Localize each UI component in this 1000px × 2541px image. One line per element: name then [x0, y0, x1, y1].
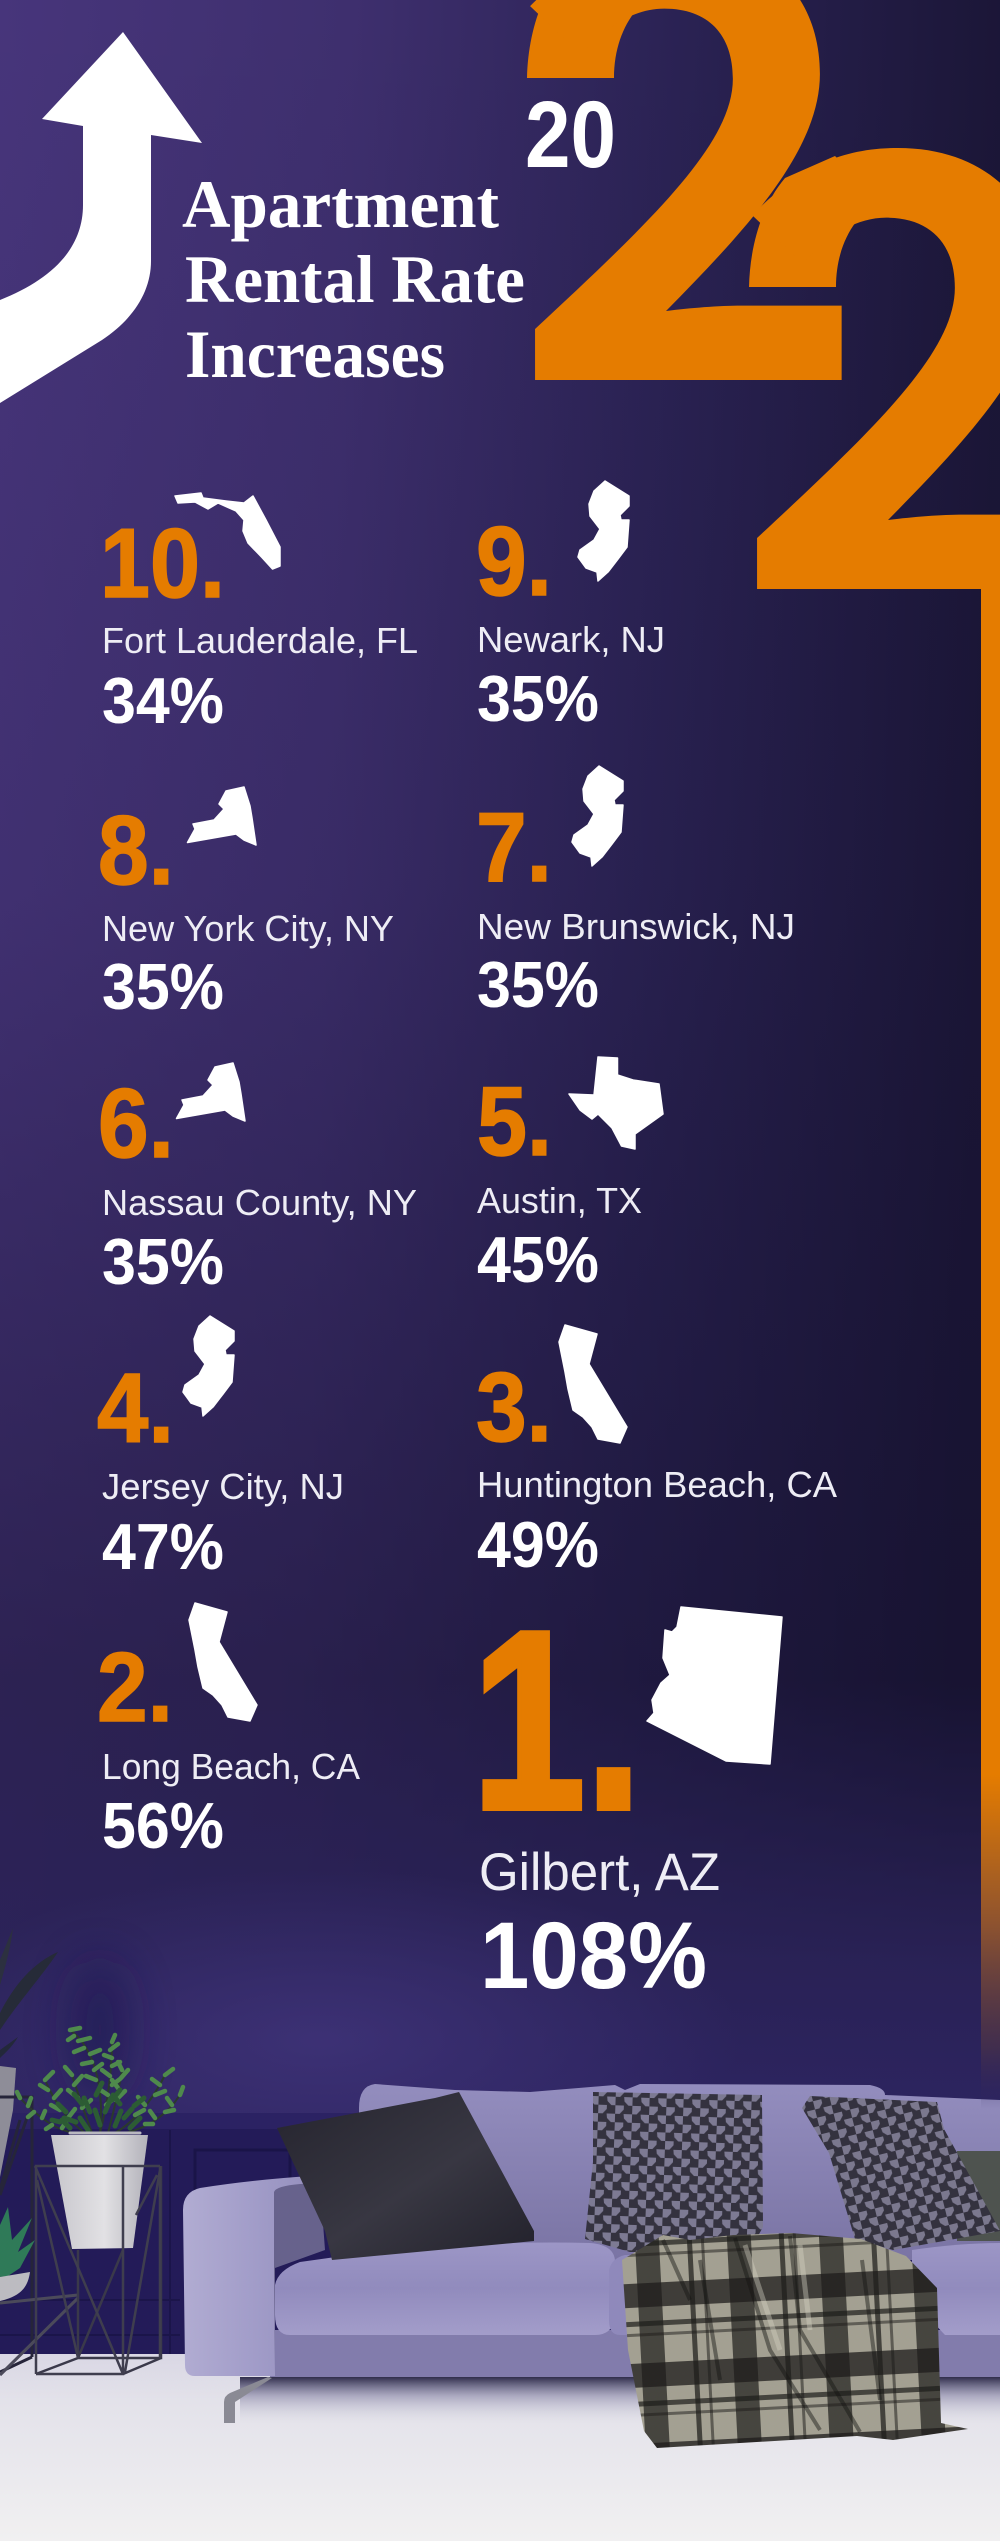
- wall panelling: [0, 2113, 1000, 2358]
- panel: rank 4: [97, 1316, 344, 1583]
- rank: 4.: [97, 1353, 174, 1463]
- sofa: [183, 2084, 1000, 2448]
- plant shadow on wall: [70, 1976, 132, 2086]
- stand front: [35, 2166, 160, 2374]
- rank: 3.: [476, 1352, 552, 1462]
- panel: rank 1: [472, 1578, 782, 2009]
- panel: rank 7: [476, 766, 795, 1021]
- panel: rank 5: [477, 1057, 663, 1296]
- icon: New Jersey: [572, 766, 623, 866]
- orange vertical strip: [981, 589, 1000, 2109]
- icon: Florida: [175, 493, 280, 569]
- percent: 47%: [102, 1510, 224, 1583]
- icon: California: [189, 1603, 257, 1721]
- plaid blanket: [622, 2233, 968, 2448]
- title: [182, 182, 524, 378]
- year prefix 20: 20: [525, 82, 616, 188]
- potted plant on wire stand: [17, 2028, 183, 2374]
- foliage: [17, 2028, 183, 2133]
- city: Nassau County, NY: [102, 1182, 417, 1223]
- city: New York City, NY: [102, 908, 394, 949]
- floor: [0, 2354, 1000, 2541]
- rank: 6.: [98, 1068, 174, 1178]
- photo: living room: [0, 1928, 1000, 2541]
- city: Fort Lauderdale, FL: [102, 620, 418, 661]
- icon: California: [559, 1325, 627, 1443]
- big year numerals: first 2 of 2022: [527, 0, 842, 380]
- bar extension: [830, 525, 1000, 589]
- houndstooth pillow: [585, 2092, 763, 2252]
- seat cushion right: [912, 2243, 1000, 2335]
- sofa shadow: [240, 2377, 1000, 2414]
- percent: 56%: [102, 1789, 224, 1862]
- percent: 35%: [477, 662, 599, 735]
- percent: 35%: [102, 950, 224, 1023]
- rank: 10.: [100, 508, 225, 618]
- icon: New Jersey: [183, 1316, 234, 1416]
- city: Jersey City, NJ: [102, 1466, 344, 1507]
- title: Increases: [185, 316, 445, 392]
- digit terminal: [749, 156, 854, 287]
- city: Long Beach, CA: [102, 1746, 360, 1787]
- stand back: [36, 2166, 161, 2374]
- seat cushion left: [275, 2242, 615, 2335]
- rank: 1.: [472, 1578, 642, 1862]
- percent: 34%: [102, 664, 224, 737]
- panel: rank 6: [98, 1063, 417, 1298]
- left plant and stand: [0, 1928, 78, 2375]
- panel: rank 10: [100, 493, 418, 737]
- right side cushion behind: [957, 2151, 1000, 2241]
- big year numerals: second 2 of 2022: [749, 148, 1000, 589]
- percent: 35%: [477, 948, 599, 1021]
- city: Newark, NJ: [477, 619, 665, 660]
- panel: rank 9: [476, 481, 665, 735]
- rank: 8.: [98, 795, 174, 905]
- percent: 35%: [102, 1225, 224, 1298]
- dark pillow: [277, 2092, 534, 2260]
- pot: [51, 2135, 148, 2249]
- sofa arm: [183, 2176, 303, 2376]
- city: New Brunswick, NJ: [477, 906, 795, 947]
- houndstooth pillow right: [802, 2096, 1000, 2250]
- icon: New York: [176, 1063, 245, 1121]
- sofa back: [359, 2084, 1000, 2260]
- panel: rank 8: [98, 787, 394, 1023]
- icon: New Jersey: [578, 481, 629, 581]
- rank: 7.: [476, 792, 552, 902]
- digit terminal: [527, 14, 632, 78]
- icon: Texas: [569, 1057, 663, 1149]
- sofa leg: [224, 2377, 272, 2423]
- percent: 49%: [477, 1508, 599, 1581]
- icon: New York: [188, 787, 256, 845]
- panel: rank 2: [97, 1603, 360, 1862]
- rank: 2.: [97, 1632, 173, 1742]
- percent: 108%: [480, 1903, 707, 2009]
- percent: 45%: [477, 1223, 599, 1296]
- city: Gilbert, AZ: [479, 1843, 720, 1902]
- city: Austin, TX: [477, 1180, 642, 1221]
- title: Apartment: [182, 166, 499, 242]
- icon: rising arrow: [0, 32, 202, 403]
- seat cushion centre: [609, 2255, 630, 2335]
- sofa base: [270, 2330, 1000, 2377]
- rank: 5.: [477, 1066, 552, 1176]
- title: Rental Rate: [185, 241, 525, 317]
- rank: 9.: [476, 506, 552, 616]
- panel: rank 3: [476, 1325, 837, 1581]
- icon: Arizona: [647, 1607, 782, 1764]
- city: Huntington Beach, CA: [477, 1464, 837, 1505]
